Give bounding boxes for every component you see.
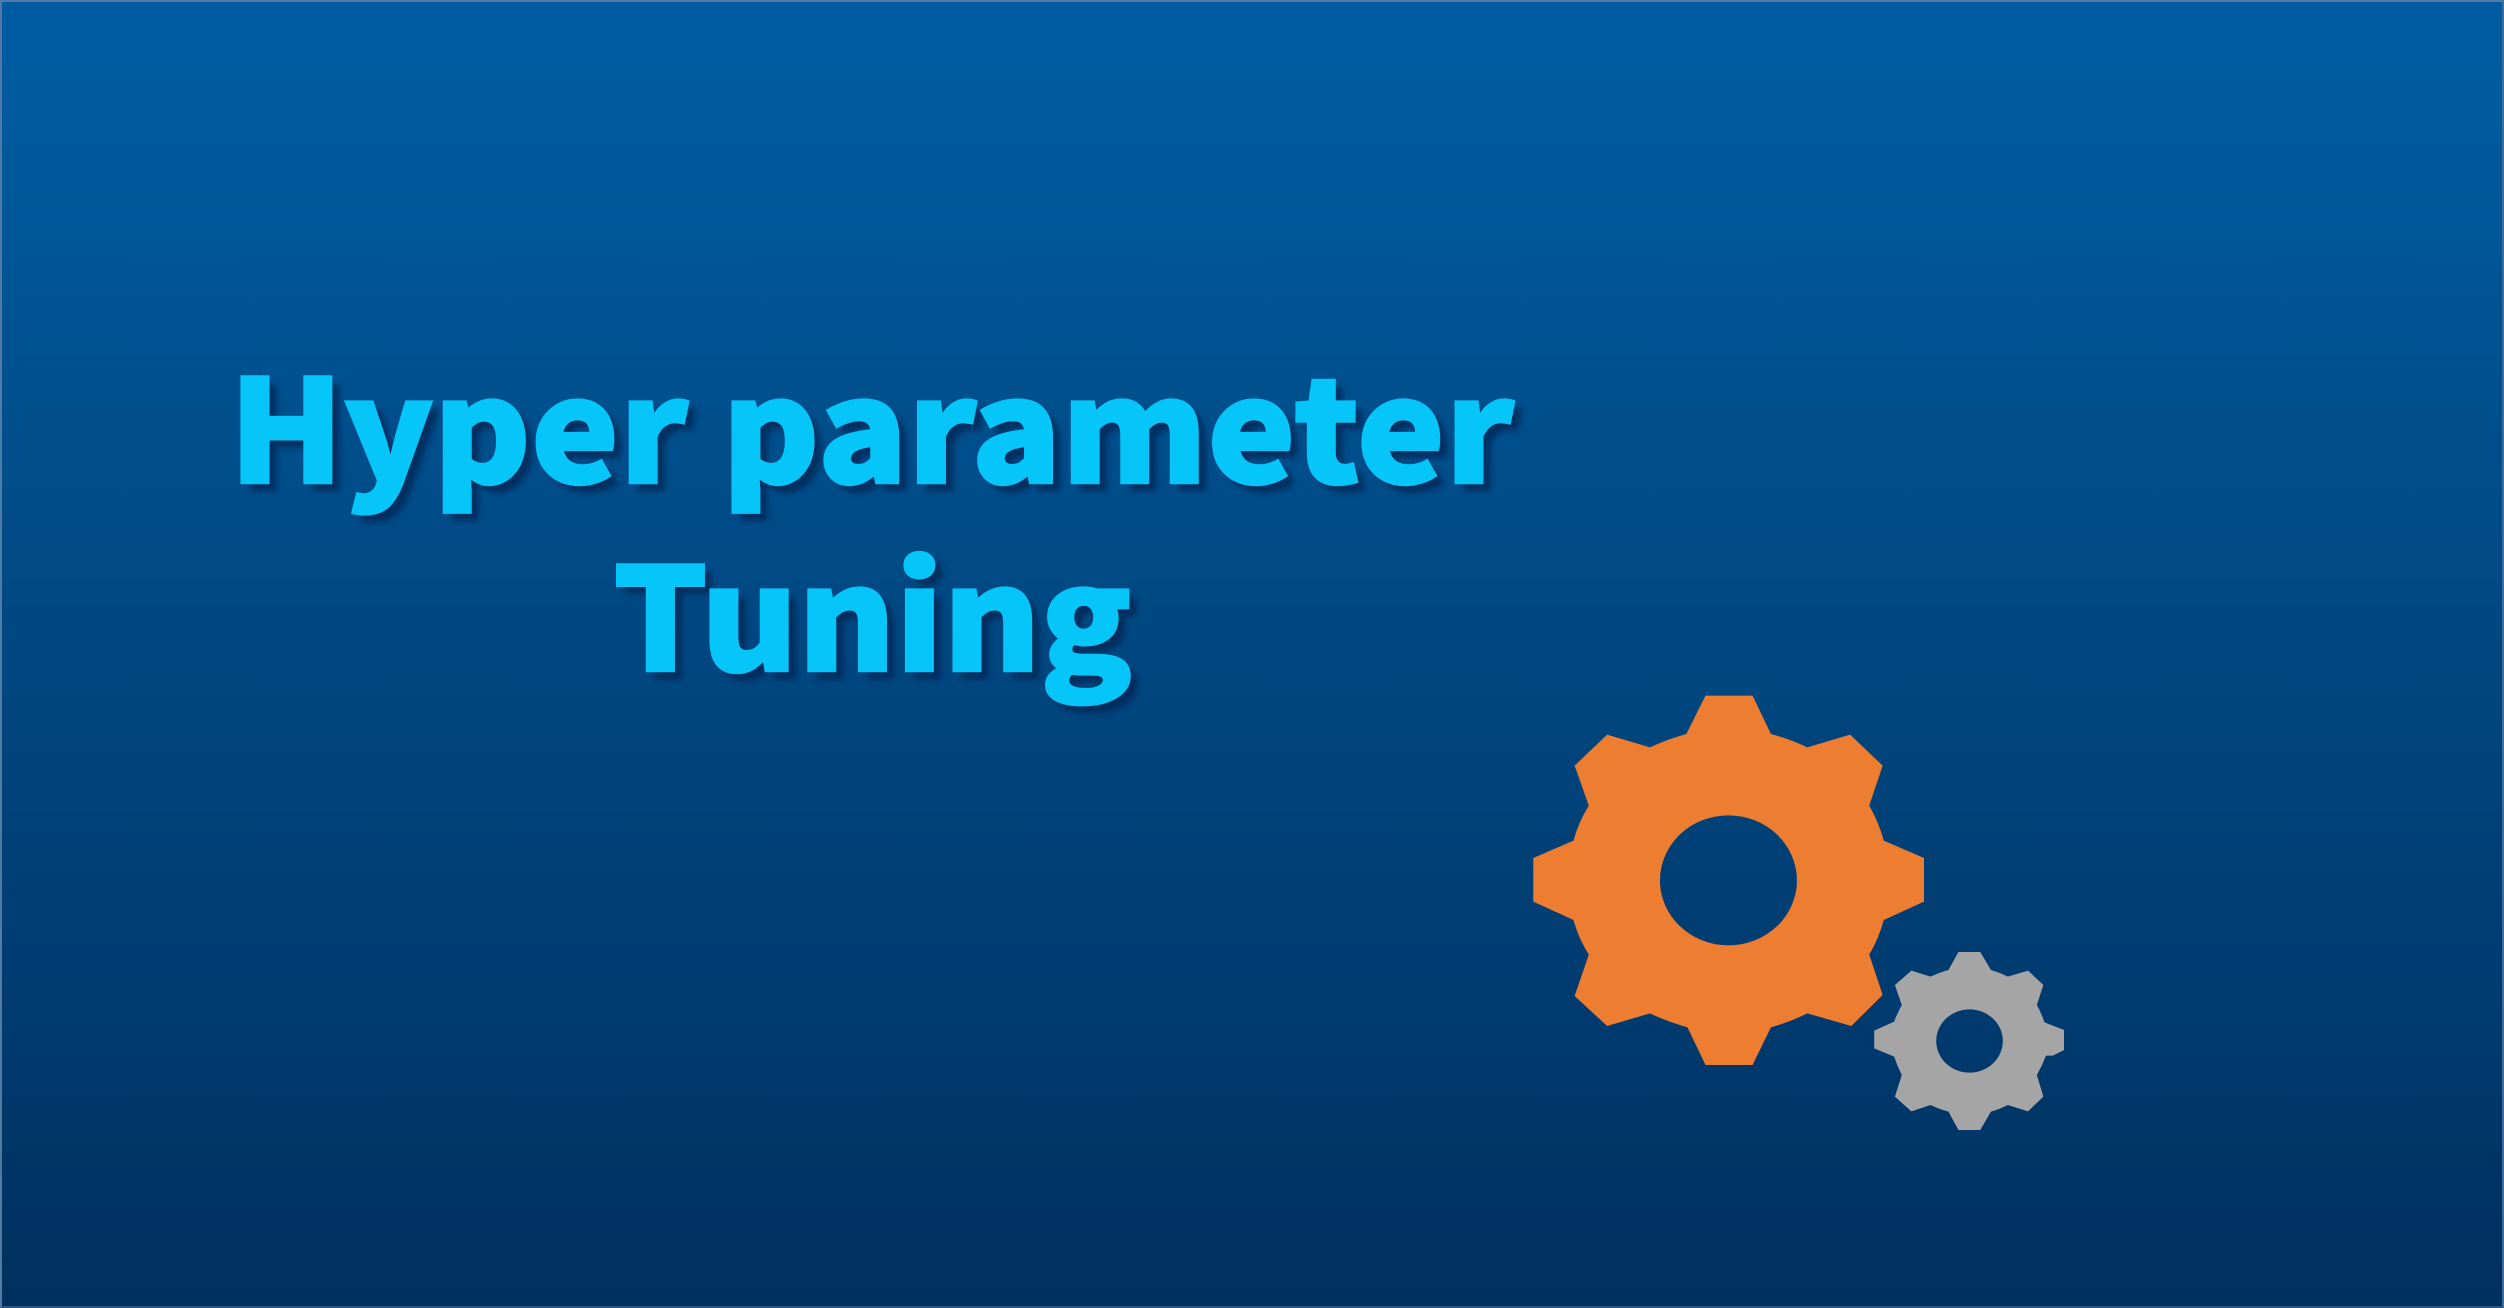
icon: large orange gear xyxy=(1533,696,1924,1065)
icon: small grey gear xyxy=(1874,952,2064,1130)
title line 1: Hyper parameter xyxy=(229,318,1514,525)
title line 2: Tuning xyxy=(613,506,1132,713)
icon: gears xyxy=(1533,696,2064,1130)
